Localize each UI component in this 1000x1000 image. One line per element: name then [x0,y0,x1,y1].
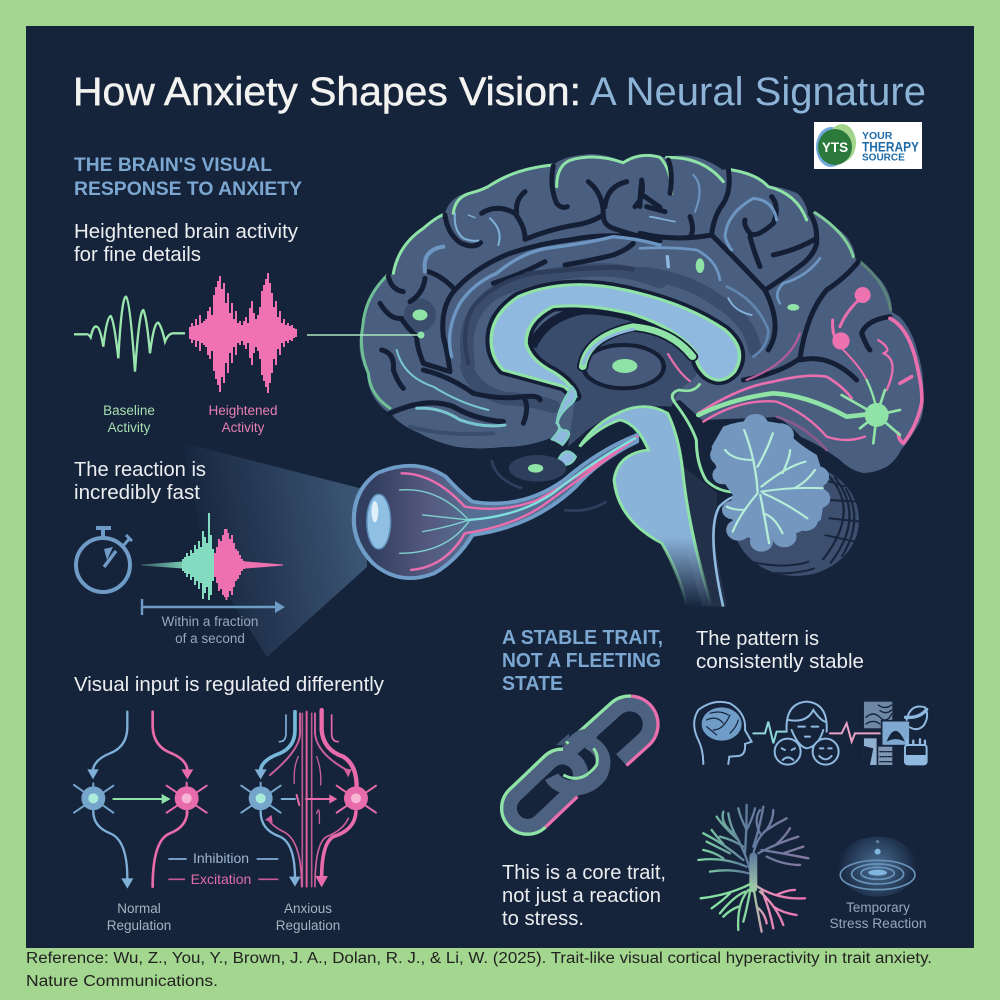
shaded inner right [640,273,755,350]
icon: tree with roots [698,805,808,932]
cerebellum [710,414,830,552]
reference footer: Nature Communications. [26,973,218,990]
deep brain region [530,310,700,447]
legend: inhibition and excitation [168,850,278,887]
pink rim occipital [890,318,922,443]
pink neurons [832,287,893,410]
label: anxious regulation: Regulation [276,918,340,933]
striped back cerebellum [679,463,861,607]
label: heightened activity: Activity [222,420,265,435]
deep structures [354,285,830,607]
sulci left [380,166,660,423]
label: baseline activity: Baseline [103,403,155,418]
right cortex details [640,157,891,380]
text: heightened brain activity [74,220,299,266]
logo: Your Therapy Source: SOURCE [862,152,905,164]
left cortex details [361,155,660,434]
midbrain squiggle [672,383,756,493]
icon: ripple [838,837,918,897]
label: temporary stress reaction [830,900,926,931]
blue highlights right [640,175,820,380]
label: heightened activity: Heightened [208,403,278,418]
brain silhouette [359,154,923,473]
label: normal regulation [107,901,171,933]
small pink tract [668,353,691,382]
heading: stable trait: STATE [502,673,563,695]
logo: Your Therapy Source [814,122,922,169]
text: core trait [502,861,666,930]
occipital neurons and visual pathway [698,287,922,450]
reference footer [26,950,932,990]
corpus callosum [491,285,740,397]
text: core trait: not just a reaction [502,884,661,907]
label: temporary stress reaction: Stress Reaction [830,916,926,931]
sulci right [640,160,890,380]
heading: stable trait [502,627,663,695]
green rim right [660,157,891,310]
text: reaction is fast: incredibly fast [74,481,200,504]
ventricle [551,387,576,465]
icon: stopwatch [76,528,132,592]
chart: heightened waveform [190,273,296,393]
label: baseline activity [103,403,155,435]
heading: stable trait: NOT A FLEETING [502,650,661,672]
text: core trait: This is a core trait, [502,861,666,884]
text: pattern stable: The pattern is [696,627,819,650]
title [73,70,926,114]
title: How Anxiety Shapes Vision: [73,70,581,114]
legend: inhibition and excitation: Excitation [191,871,251,887]
label: normal regulation: Regulation [107,918,171,933]
fornix arc [583,327,693,367]
label: within a fraction of a second [162,614,258,646]
label: normal regulation: Normal [117,901,161,916]
heading: brain's visual response [74,154,302,200]
text: heightened brain activity: for fine details [74,243,201,266]
legend: inhibition and excitation: Inhibition [193,850,249,866]
text: reaction is fast [74,458,206,504]
dark crescent [532,310,691,347]
text: pattern stable: consistently stable [696,650,864,673]
head with brain [694,702,752,764]
green spot near pointer [412,310,428,320]
pointer line to brain [307,332,424,338]
label: heightened activity [208,403,278,435]
text: reaction is fast: The reaction is [74,458,206,481]
heading: brain's visual response: THE BRAIN'S VISUAL [74,154,272,176]
reference footer: Reference: Wu, Z., You, Y., Brown, J. A., Dolan, R. J., & Li, W. (2025). Trait-like visual cortical hyperactivity in trait anxiety. [26,950,932,967]
text: pattern stable [696,627,864,673]
logo: Your Therapy Source: YOUR [862,130,893,142]
eye and optic nerve [354,435,637,578]
label: within a fraction of a second: of a second [175,631,245,646]
lower dark lobe and spot [492,455,606,511]
logo: Your Therapy Source: YTS [822,140,848,155]
green rim left [361,155,660,408]
pulse lines [753,722,880,743]
diagram: normal regulation [74,712,207,889]
title: A Neural Signature [590,70,926,114]
illustration: brain [354,154,923,607]
brainstem [580,407,712,607]
text: heightened brain activity: Heightened brain activity [74,220,299,243]
icon: chain links [491,684,670,845]
pathway streams [698,376,877,450]
logo: Your Therapy Source: THERAPY [862,138,920,154]
label: anxious regulation [276,901,340,933]
faces [775,702,839,765]
diagram: anxious regulation [241,710,376,887]
label: anxious regulation: Anxious [284,901,332,916]
icon row: head, faces, patterns [694,702,927,765]
text: core trait: to stress. [502,907,584,930]
chart: fast waveform [141,513,283,600]
blue and cyan gyrus highlights left [397,213,660,434]
pattern tiles [864,702,927,765]
heading: brain's visual response: RESPONSE TO ANXIETY [74,178,302,200]
label: baseline activity: Activity [108,420,151,435]
heading: stable trait: A STABLE TRAIT, [502,627,663,649]
activity spots right [696,258,799,311]
label: within a fraction of a second: Within a fraction [162,614,258,629]
label: temporary stress reaction: Temporary [846,900,910,915]
chart: baseline waveform [74,297,185,372]
text: visual input regulated: Visual input is regulated differently [74,673,385,696]
vision beam [183,443,367,657]
green neuron star [842,390,900,443]
shaded cingulate region [467,270,660,363]
thalamus [583,345,664,388]
arrow: time span [142,599,285,615]
